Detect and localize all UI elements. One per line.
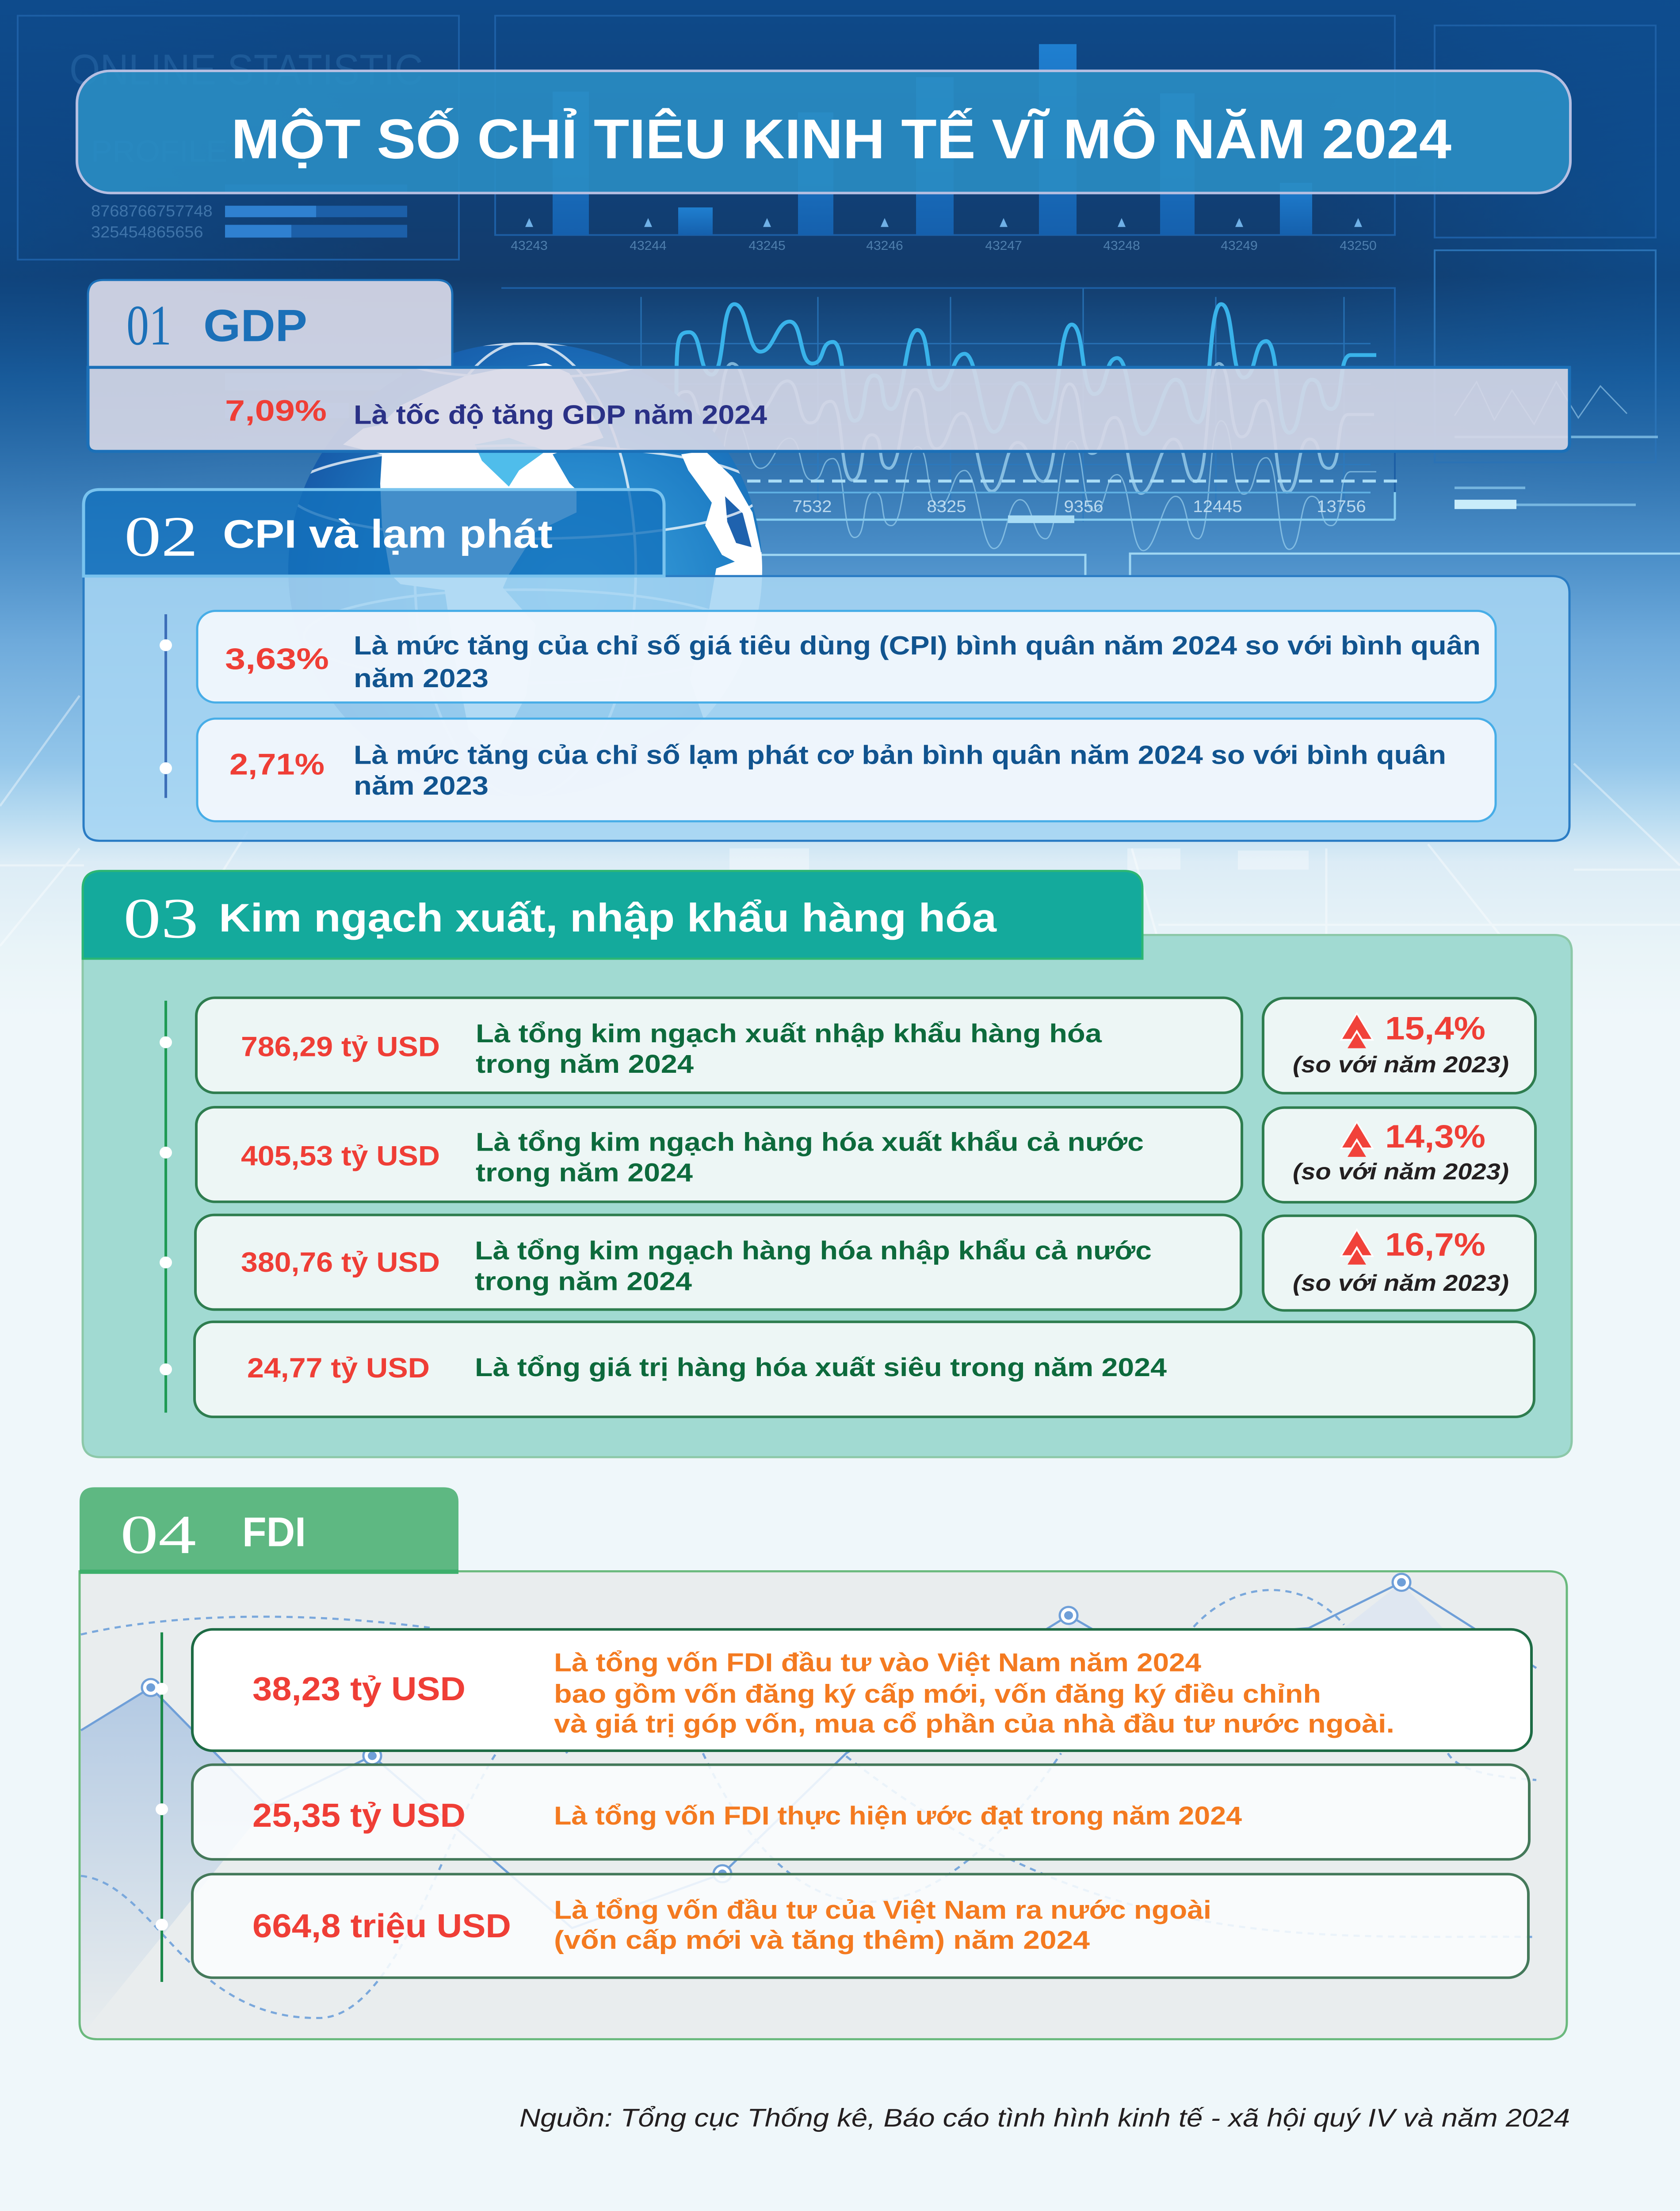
change badge 14,3%: 14,3% xyxy=(1385,1118,1485,1155)
FDI row 3: (vốn cấp mới và tăng thêm) năm 2024 xyxy=(554,1925,1090,1955)
section number 02: 02 xyxy=(124,505,198,568)
heading GDP: GDP xyxy=(203,301,307,351)
background: dashboard image: 43245 xyxy=(748,239,786,253)
background: dashboard image: 43250 xyxy=(1340,239,1377,253)
trade row 2: 405,53 tỷ USD xyxy=(241,1140,440,1171)
background: dashboard image: 43244 xyxy=(630,239,667,253)
tab: CPI heading xyxy=(84,490,664,576)
trade row 2: trong năm 2024 xyxy=(476,1158,693,1187)
GDP value: 7,09% xyxy=(225,394,327,427)
timeline xyxy=(156,1632,168,1982)
heading CPI: CPI và lạm phát xyxy=(223,512,553,556)
panel: 02 CPI xyxy=(84,490,1569,841)
FDI row 1: Là tổng vốn FDI đầu tư vào Việt Nam năm 2024 xyxy=(554,1648,1201,1677)
tab: GDP heading xyxy=(88,280,452,367)
FDI row 3 xyxy=(192,1874,1528,1978)
change badge 15,4%: (so với năm 2023) xyxy=(1293,1052,1509,1078)
heading trade: Kim ngạch xuất, nhập khẩu hàng hóa xyxy=(219,895,997,940)
trade row 3 xyxy=(195,1215,1241,1309)
GDP value bar xyxy=(88,367,1569,451)
background: dashboard image: 43247 xyxy=(985,239,1022,253)
FDI row 1: 38,23 tỷ USD xyxy=(252,1671,466,1708)
trade row 4 xyxy=(195,1322,1534,1417)
CPI row 2: 2,71% xyxy=(229,747,325,781)
FDI row 1 xyxy=(192,1630,1531,1751)
change badge 14,3%: (so với năm 2023) xyxy=(1293,1159,1509,1185)
background: dashboard image: ONLINE STATISTIC xyxy=(69,46,423,94)
CPI row 1: Là mức tăng của chỉ số giá tiêu dùng (CPI) bình quân năm 2024 so với bình quân xyxy=(354,631,1481,660)
trade row 4: 24,77 tỷ USD xyxy=(247,1352,430,1384)
CPI row 2: Là mức tăng của chỉ số lạm phát cơ bản bình quân năm 2024 so với bình quân xyxy=(354,740,1446,769)
title text: MỘT SỐ CHỈ TIÊU KINH TẾ VĨ MÔ NĂM 2024 xyxy=(231,107,1451,170)
panel: 03 import export xyxy=(83,871,1572,1457)
CPI row 1 xyxy=(197,611,1496,703)
CPI row 1: năm 2023 xyxy=(354,663,489,693)
change badge 15,4%: 15,4% xyxy=(1385,1010,1485,1046)
FDI row 3: 664,8 triệu USD xyxy=(252,1908,511,1945)
background: dashboard image: 43243 xyxy=(511,239,548,253)
change badge 14,3% xyxy=(1263,1108,1535,1202)
trade row 3: 380,76 tỷ USD xyxy=(241,1246,440,1278)
background: dashboard image: 8325 xyxy=(927,497,966,516)
background: dashboard image: 43248 xyxy=(1103,239,1140,253)
change badge 15,4% xyxy=(1263,998,1535,1093)
FDI row 1: và giá trị góp vốn, mua cổ phần của nhà đầu tư nước ngoài. xyxy=(554,1709,1394,1738)
source note: Nguồn: Tổng cục Thống kê, Báo cáo tình hình kinh tế - xã hội quý IV và năm 2024 xyxy=(519,2104,1570,2132)
change badge 16,7% xyxy=(1263,1216,1535,1310)
background: dashboard image: 325454865656 xyxy=(91,223,203,241)
background: dashboard image: 7532 xyxy=(793,497,832,516)
trade row 1: Là tổng kim ngạch xuất nhập khẩu hàng hóa xyxy=(476,1019,1102,1048)
tab: trade heading xyxy=(83,871,1142,959)
FDI panel body xyxy=(80,1571,1567,2039)
FDI row 3: Là tổng vốn đầu tư của Việt Nam ra nước ngoài xyxy=(554,1895,1211,1924)
globe illustration xyxy=(288,342,762,717)
panel: 01 GDP xyxy=(88,280,1569,451)
GDP description: Là tốc độ tăng GDP năm 2024 xyxy=(354,400,767,430)
background: dashboard image: 13756 xyxy=(1317,497,1366,516)
timeline xyxy=(160,1001,172,1413)
change badge 16,7%: 16,7% xyxy=(1385,1227,1485,1262)
CPI panel body xyxy=(84,576,1569,841)
section number 03: 03 xyxy=(123,887,199,950)
FDI row 1: bao gồm vốn đăng ký cấp mới, vốn đăng ký điều chỉnh xyxy=(554,1679,1321,1708)
background: dashboard image: 12445 xyxy=(1193,497,1242,516)
trade row 3: trong năm 2024 xyxy=(475,1266,692,1296)
section number 04: 04 xyxy=(120,1503,196,1565)
trade row 1 xyxy=(196,998,1242,1093)
CPI row 2: năm 2023 xyxy=(354,771,489,800)
background: dashboard image: 9356 xyxy=(1064,497,1103,516)
trade row 1: 786,29 tỷ USD xyxy=(241,1031,440,1062)
tab: FDI heading xyxy=(80,1487,458,1574)
chart decoration xyxy=(81,1574,1536,2036)
trade row 2 xyxy=(196,1107,1242,1202)
background: dashboard image: PROFILE 7 xyxy=(91,134,254,168)
trade row 2: Là tổng kim ngạch hàng hóa xuất khẩu cả nước xyxy=(476,1128,1144,1156)
background: dashboard image: 43249 xyxy=(1221,239,1258,253)
timeline xyxy=(160,614,172,798)
change badge 16,7%: (so với năm 2023) xyxy=(1293,1270,1509,1296)
FDI row 2: Là tổng vốn FDI thực hiện ước đạt trong năm 2024 xyxy=(554,1801,1242,1830)
trade panel body xyxy=(83,935,1572,1457)
background: dashboard image: 8768766757748 xyxy=(91,202,213,220)
FDI row 2: 25,35 tỷ USD xyxy=(252,1797,466,1834)
title banner xyxy=(77,71,1570,193)
CPI row 2 xyxy=(197,719,1496,821)
background: dashboard image: 43246 xyxy=(866,239,903,253)
trade row 1: trong năm 2024 xyxy=(476,1049,694,1079)
trade row 4: Là tổng giá trị hàng hóa xuất siêu trong năm 2024 xyxy=(475,1353,1167,1382)
CPI row 1: 3,63% xyxy=(225,642,329,676)
trade row 3: Là tổng kim ngạch hàng hóa nhập khẩu cả nước xyxy=(475,1236,1152,1265)
heading FDI: FDI xyxy=(242,1509,306,1555)
section number 01: 01 xyxy=(126,293,172,357)
FDI row 2 xyxy=(192,1765,1529,1859)
panel: 04 FDI xyxy=(80,1487,1567,2039)
